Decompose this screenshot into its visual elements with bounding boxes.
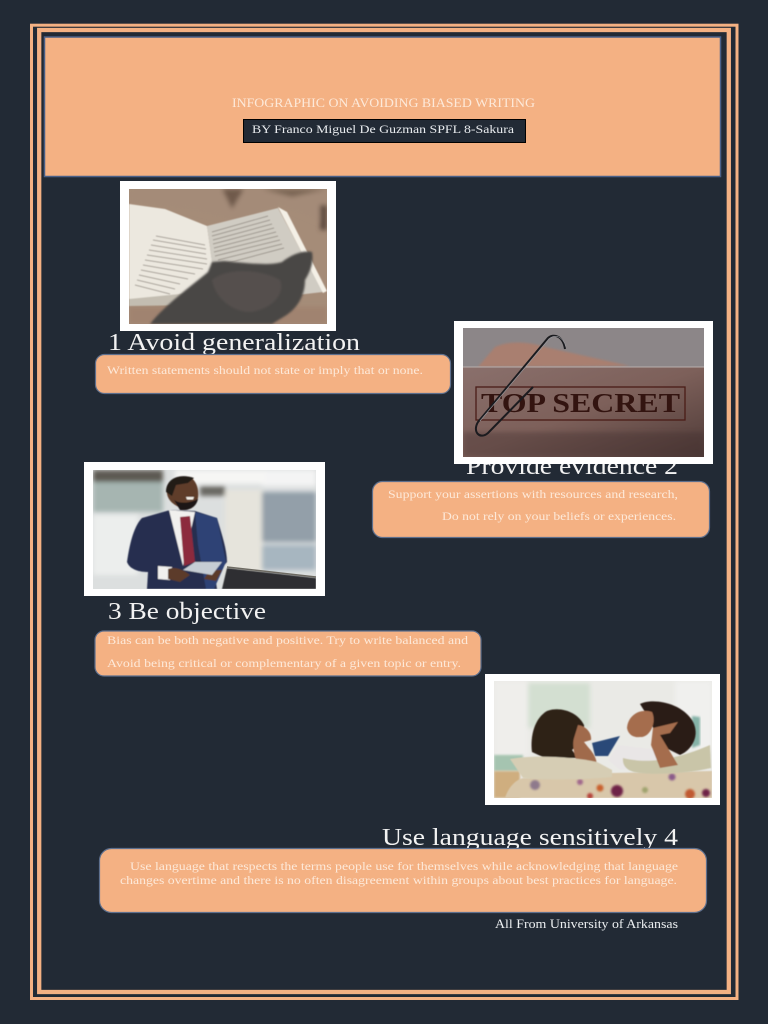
cat [150,251,313,324]
photo 2: top secret folder: TOP SECRET [481,388,680,418]
callout 4 [100,848,706,912]
title: INFOGRAPHIC ON AVOIDING BIASED WRITING [232,96,535,110]
callout 3 [95,631,481,676]
callout 3: Avoid being critical or complementary of a given topic or entry. [107,658,461,670]
byline box: BY Franco Miguel De Guzman SPFL 8-Sakura [252,122,515,136]
callout 4: Use language that respects the terms people use for themselves while acknowledging that language [130,859,678,873]
photo 4: two women talking [485,674,720,805]
callout 1 [96,354,450,394]
heading 1: 1 Avoid generalization [108,330,360,356]
photo 3: businessman [84,462,325,596]
callout 2 [372,482,710,538]
left woman [532,709,584,758]
photo 2: top secret folder [454,321,713,464]
callout 4: changes overtime and there is no often disagreement within groups about best practices for language. [120,873,677,887]
heading 3: 3 Be objective [108,599,266,625]
right woman [640,701,696,755]
callout 2: Support your assertions with resources and research, [388,489,678,501]
callout 3: Bias can be both negative and positive. Try to write balanced and [107,635,468,647]
source note: All From University of Arkansas [495,917,678,931]
man [127,476,227,589]
byline box [244,120,526,142]
photo 1: book and cat [120,181,336,331]
callout 1: Written statements should not state or imply that or none. [107,365,423,377]
right pillow [623,745,711,774]
floral bedspread [505,771,712,798]
callout 2: Do not rely on your beliefs or experiences. [442,511,676,523]
heading 2: Provide evidence 2 [466,454,678,480]
left pillow [510,757,612,779]
header panel [44,37,720,176]
heading 4: Use language sensitively 4 [382,825,678,851]
